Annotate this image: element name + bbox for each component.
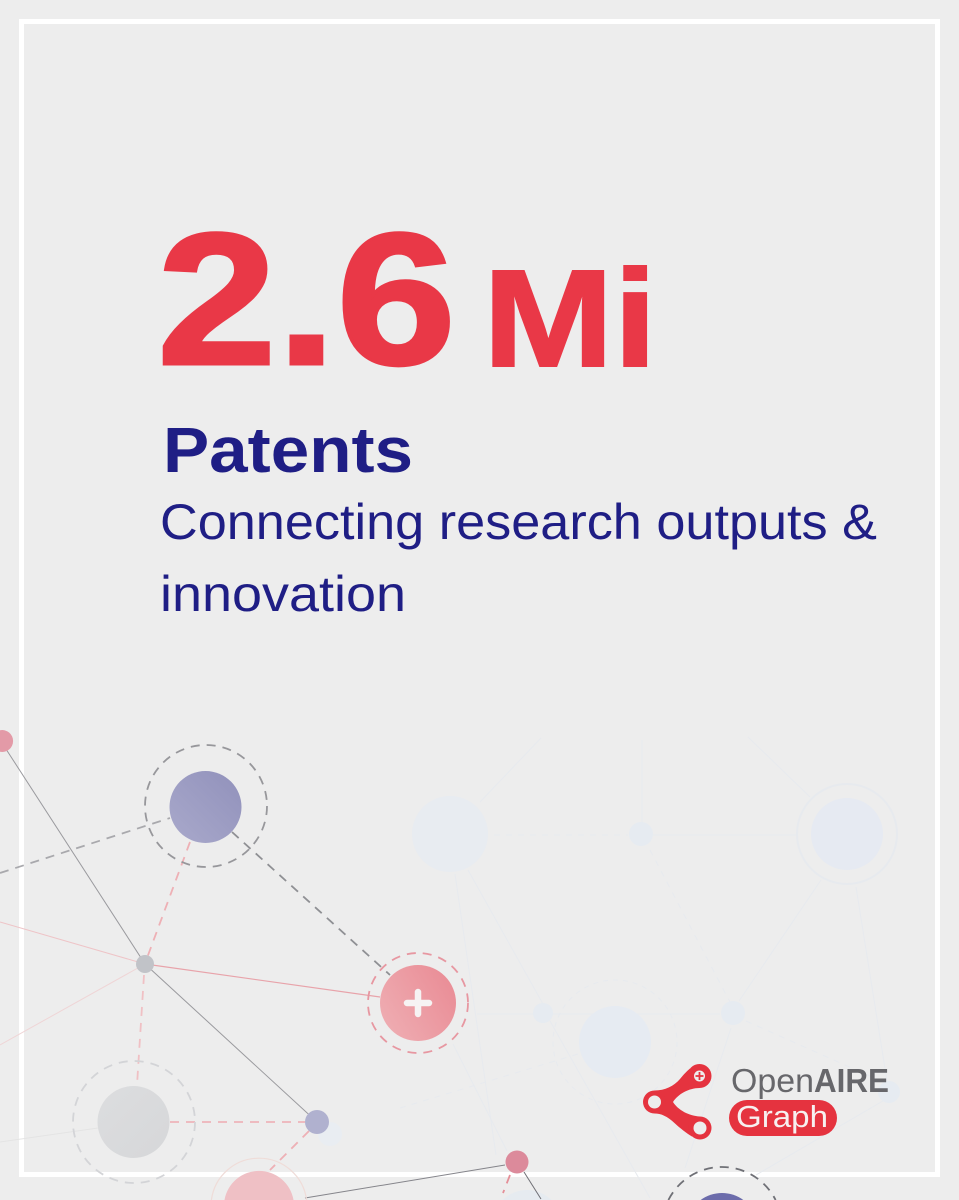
big number: 2.6 xyxy=(157,194,456,404)
logo wordmark: AIRE: AIRE xyxy=(814,1062,889,1099)
subtitle line 2: innovation xyxy=(160,566,406,622)
unit: Mi xyxy=(483,242,657,396)
node: grey hub xyxy=(136,955,154,973)
subtitle line 1: Connecting research outputs & xyxy=(160,494,877,550)
node: purple bottom with dashed ring xyxy=(668,1167,776,1200)
heading: Patents xyxy=(163,414,413,486)
node: bottom pink xyxy=(211,1158,307,1200)
node: large grey with dashed ring xyxy=(73,1061,195,1183)
logo: OpenAIRE Graph xyxy=(643,1062,889,1140)
node: large blue with dashed ring xyxy=(145,745,267,867)
node: pink small bottom xyxy=(506,1150,528,1174)
logo pill: Graph: Graph xyxy=(736,1099,828,1134)
faint background network xyxy=(318,737,900,1200)
network lines xyxy=(0,746,541,1199)
node: pink plus with dashed ring xyxy=(368,953,468,1053)
node: pink top-left xyxy=(0,730,13,752)
logo wordmark: Open: Open xyxy=(731,1062,814,1099)
node: small blue xyxy=(305,1110,329,1134)
logo icon xyxy=(643,1064,712,1140)
